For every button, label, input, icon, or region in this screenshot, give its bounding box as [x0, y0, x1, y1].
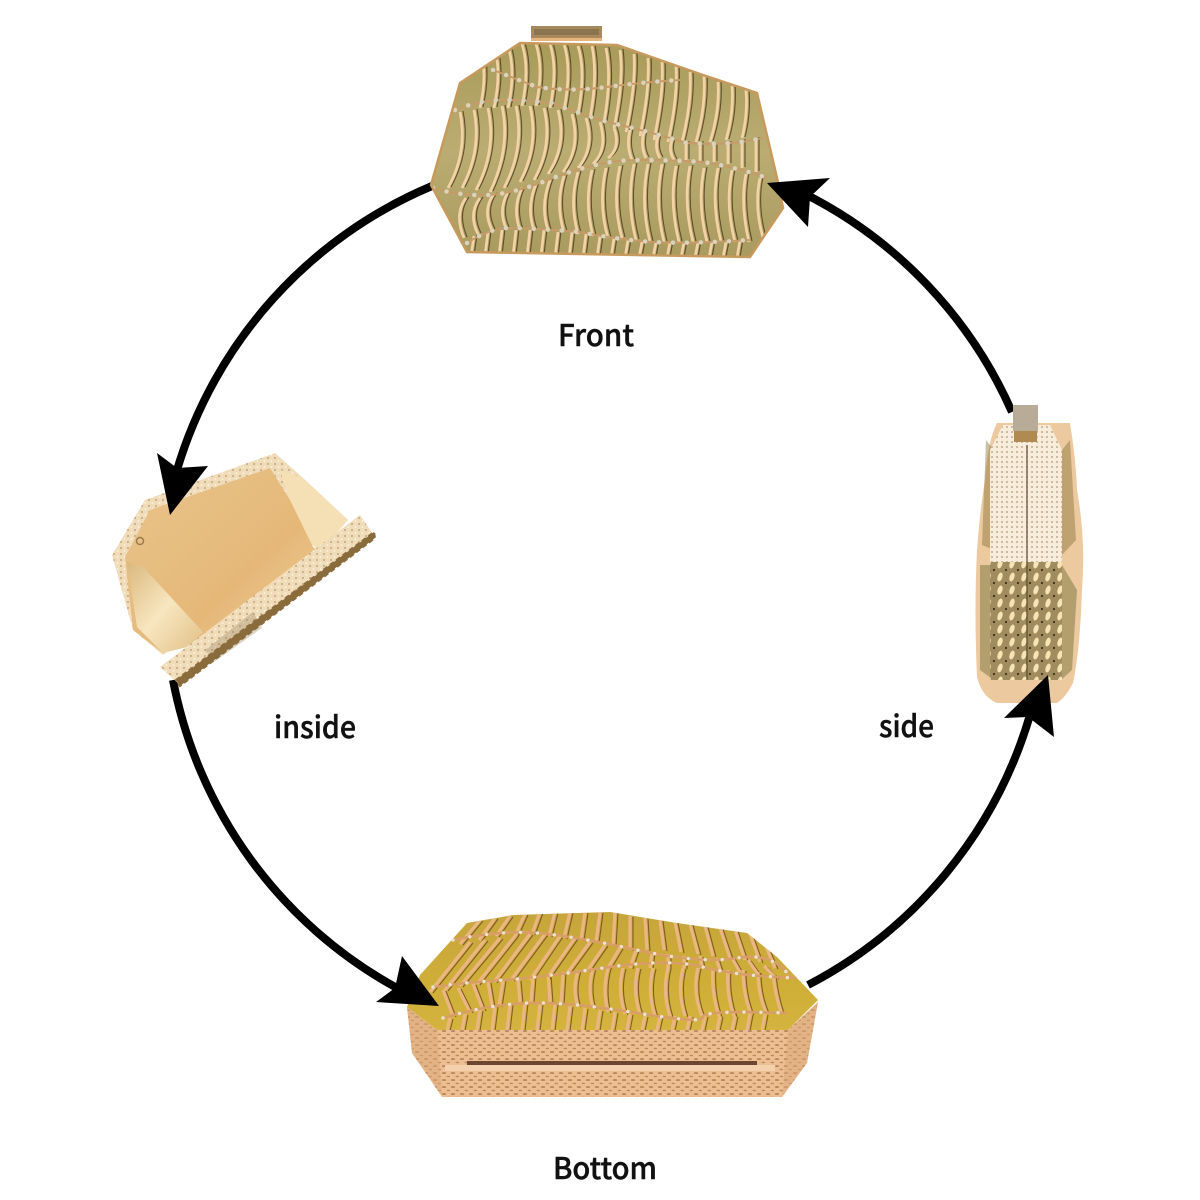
label: Bottom: Bottom — [553, 1144, 657, 1188]
label: side: side — [879, 702, 934, 746]
bag photo: front view — [431, 26, 783, 258]
circular product view diagram — [112, 26, 1084, 1180]
arrow arc: side to front — [805, 194, 1012, 412]
arrowhead: into front — [767, 178, 830, 227]
label: Front: Front — [558, 311, 634, 355]
bag photo: open inside view — [112, 453, 375, 686]
arrowhead: into bottom — [376, 956, 439, 1006]
arrow arc: bottom to side — [808, 715, 1030, 985]
arrowhead: into inside — [157, 453, 208, 515]
arrow arc: front to inside — [177, 186, 432, 470]
arrow arc: inside to bottom — [173, 680, 397, 988]
label: inside: inside — [274, 703, 356, 747]
arrowhead: into side — [1004, 675, 1054, 737]
bag photo: side view — [976, 405, 1083, 703]
bag photo: bottom view — [407, 912, 818, 1097]
